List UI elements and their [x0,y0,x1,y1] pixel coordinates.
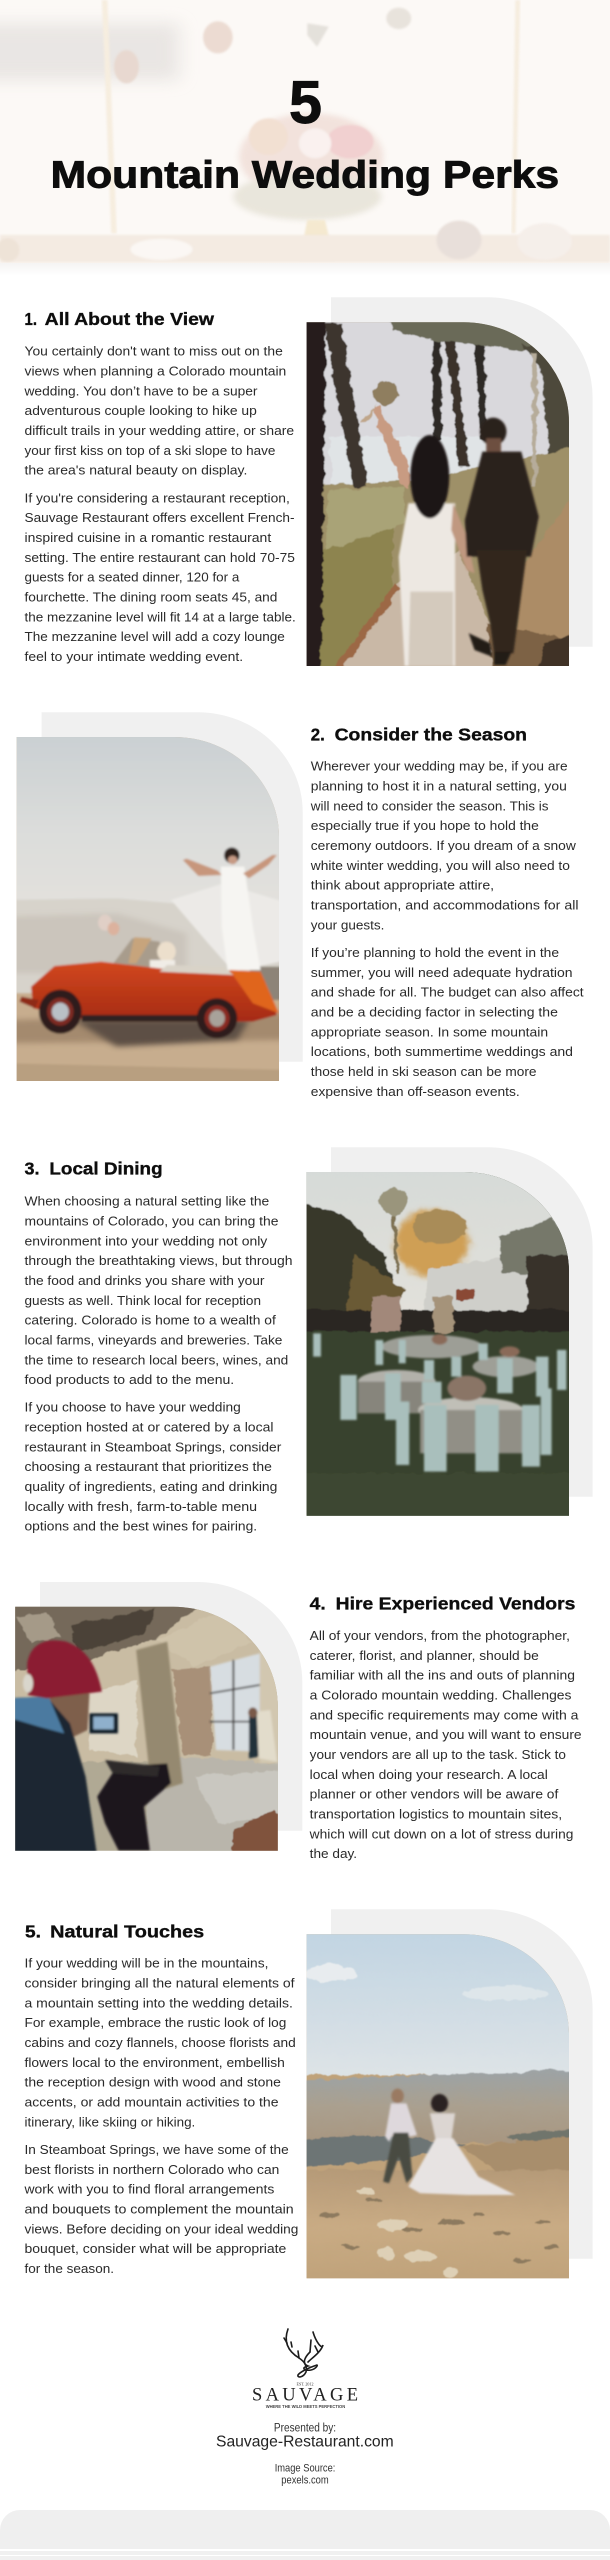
text block: the mezzanine level will fit 14 at a large table. [24,609,296,624]
text block: the day. [310,1846,357,1861]
text block: appropriate season. In some mountain [311,1024,548,1039]
text block: summer, you will need adequate hydration [311,965,573,980]
heading: All About the View [45,309,214,329]
text block: which will cut down on a lot of stress during [309,1826,573,1841]
text block: inspired cuisine in a romantic restaurant [24,530,272,545]
heading: Local Dining [49,1159,163,1179]
text block: views when planning a Colorado mountain [24,364,286,378]
text block: mountains of Colorado, you can bring the [24,1214,278,1228]
text block: restaurant in Steamboat Springs, consider [24,1439,282,1454]
footer credits: Presented by: [274,2422,336,2434]
text block: Sauvage Restaurant offers excellent French- [24,510,294,525]
text block [309,1628,582,1861]
text block: Wherever your wedding may be, if you are [311,759,568,774]
text block: and bouquets to complement the mountain [24,2202,294,2216]
text block: guests for a seated dinner, 120 for a [24,570,240,585]
text block: work with you to find floral arrangements [23,2182,275,2197]
text block: adventurous couple looking to hike up [24,403,257,418]
text block: If you're considering a restaurant reception, [24,490,290,505]
photo: bride on red convertible [16,737,279,1081]
section 4: Hire Experienced Vendors [6,1582,582,1861]
title: Mountain Wedding Perks [51,154,559,196]
footer credits: pexels.com [281,2474,329,2486]
heading: Hire Experienced Vendors [336,1594,576,1614]
text block: quality of ingredients, eating and drinking [24,1479,277,1494]
text block [23,344,296,664]
text block: environment into your wedding not only [24,1233,268,1248]
text block: and specific requirements may come with a [310,1707,579,1722]
text block: flowers local to the environment, embellish [24,2055,285,2070]
panel: grey arch behind photo 2 [42,712,303,1062]
text block: choosing a restaurant that prioritizes the [24,1459,272,1474]
text block: catering. Colorado is home to a wealth of [24,1313,276,1328]
text block: If you choose to have your wedding [24,1400,241,1415]
text block: The mezzanine level will add a cozy lounge [24,629,285,644]
text block: the reception design with wood and stone [24,2075,281,2090]
heading: 4. [310,1594,326,1614]
heading: 1. [24,309,37,329]
text block: options and the best wines for pairing. [24,1519,257,1534]
panel: grey arch behind photo 4 [40,1582,302,1831]
section 5: Natural Touches [23,1909,593,2285]
photo: couple on boardwalk [306,322,569,666]
text block: planner or other vendors will be aware of [310,1787,559,1802]
text block: white winter wedding, you will also need to [310,858,570,873]
text block: local farms, vineyards and breweries. Take [24,1332,282,1348]
panel: grey arch behind photo 1 [331,297,593,647]
text block: your first kiss on top of a ski slope to have [24,443,275,458]
est. line: EST. 2012 [296,2381,314,2386]
text block: those held in ski season can be more [311,1064,536,1079]
text block: accents, or add mountain activities to the [24,2094,278,2110]
text block: fourchette. The dining room seats 45, and [24,590,277,604]
heading: 2. [311,724,325,744]
text block: guests as well. Think local for reception [24,1293,261,1308]
text block: ceremony outdoors. If you dream of a snow [311,838,576,853]
photo: couple on mountain ridge [306,1934,569,2278]
text block: If your wedding will be in the mountains, [24,1956,268,1971]
wordmark: SAUVAGE [252,2386,358,2406]
footer logo: Sauvage antlers and wordmark [252,2329,358,2409]
text block [24,1194,292,1534]
text block: bouquet, consider what will be appropriate [24,2241,286,2256]
text block: and shade for all. The budget can also affect [311,985,584,1000]
text block: setting. The entire restaurant can hold 70-75 [24,550,295,565]
text block: reception hosted at or catered by a local [24,1420,274,1434]
text block: think about appropriate attire, [311,878,494,893]
text block: and be a deciding factor in selecting the [311,1004,558,1020]
bottom grey band [0,2510,610,2560]
panel: grey arch behind photo 5 [331,1909,593,2259]
section 1: All About the View [23,297,593,673]
text block: expensive than off-season events. [311,1084,520,1099]
text block: In Steamboat Springs, we have some of the [24,2142,289,2157]
text block: mountain venue, and you will want to ensure [310,1727,582,1742]
title [51,69,559,196]
text block: through the breathtaking views, but through [24,1253,292,1268]
text block: especially true if you hope to hold the [311,818,539,833]
text block: transportation logistics to mountain sites, [310,1806,562,1822]
text block: the time to research local beers, wines, and [24,1352,288,1367]
heading: 3. [24,1159,40,1179]
text block: the food and drinks you share with your [24,1273,265,1288]
text block: a Colorado mountain wedding. Challenges [310,1688,572,1702]
hero banner photo: faded bouquet [0,0,610,276]
footer credits: Sauvage-Restaurant.com [216,2434,394,2451]
text block: a mountain setting into the wedding details. [24,1995,293,2010]
tagline: WHERE THE WILD MEETS PERFECTION [266,2404,345,2409]
text block [310,759,584,1099]
section 2: Consider the Season [8,712,584,1099]
text block: consider bringing all the natural elements of [24,1976,295,1990]
text block: caterer, florist, and planner, should be [310,1648,539,1663]
panel: grey arch behind photo 3 [331,1147,593,1497]
text block: familiar with all the ins and outs of planning [310,1668,575,1683]
icon: antlers [284,2329,323,2377]
text block: difficult trails in your wedding attire, or share [24,423,294,438]
footer credits [216,2422,394,2486]
text block: planning to host it in a natural setting, you [311,778,567,794]
footer credits: Image Source: [275,2462,335,2474]
heading: Consider the Season [335,724,527,744]
text block: food products to add to the menu. [24,1372,234,1387]
text block: best florists in northern Colorado who can [24,2162,279,2177]
text block: locations, both summertime weddings and [311,1044,573,1059]
photo: videographer filming couple [15,1606,278,1851]
heading: 5. [25,1921,41,1941]
heading: Natural Touches [50,1921,204,1941]
text block: the area's natural beauty on display. [24,463,247,478]
photo: outdoor reception tables at sunset [306,1172,569,1516]
text block: locally with fresh, farm-to-table menu [24,1499,257,1514]
text block: For example, embrace the rustic look of log [24,2015,286,2030]
text block: transportation, and accommodations for all [311,898,579,912]
section 3: Local Dining [24,1147,593,1534]
text block: itinerary, like skiing or hiking. [24,2114,195,2129]
text block: All of your vendors, from the photographer, [310,1628,570,1643]
text block: local when doing your research. A local [310,1767,548,1782]
text block: your vendors are all up to the task. Stick to [310,1747,566,1762]
text block: for the season. [24,2261,114,2276]
text block: views. Before deciding on your ideal wedding [24,2221,298,2236]
text block: If you’re planning to hold the event in the [311,945,559,960]
title: 5 [289,69,322,136]
text block [23,1956,298,2276]
text block: will need to consider the season. This is [310,798,549,813]
text block: You certainly don't want to miss out on the [24,344,283,359]
text block: your guests. [311,917,384,932]
text block: cabins and cozy flannels, choose florists and [24,2035,296,2050]
text block: When choosing a natural setting like the [24,1194,269,1209]
text block: feel to your intimate wedding event. [24,649,243,664]
text block: wedding. You don’t have to be a super [23,383,258,398]
